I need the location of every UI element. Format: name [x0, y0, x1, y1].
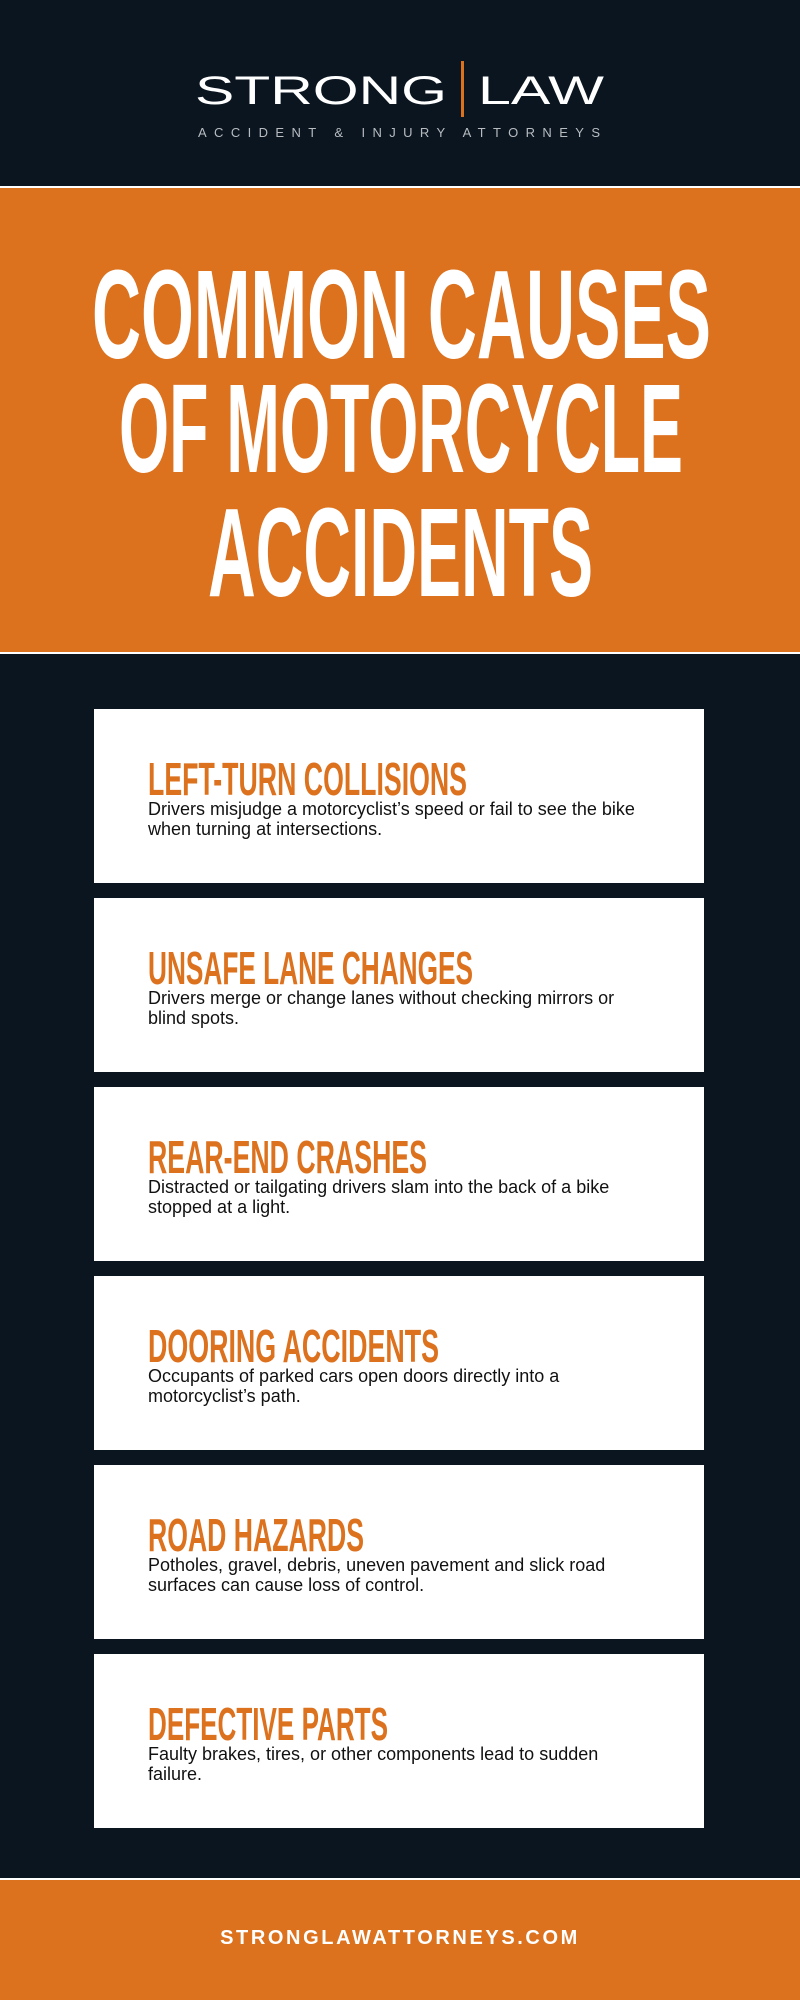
card: defective parts: Faulty brakes, tires, or other components lead to sudden failure. [148, 1744, 598, 1784]
title banner [0, 186, 800, 654]
card: road hazards [94, 1465, 704, 1639]
card: road hazards: Potholes, gravel, debris, uneven pavement and slick road surfaces can cause loss of control. [148, 1555, 605, 1595]
title [92, 244, 711, 623]
card: defective parts [94, 1654, 704, 1828]
card: unsafe lane changes: Drivers merge or change lanes without checking mirrors or blind spots. [148, 988, 614, 1028]
logo text: LAW [478, 69, 604, 113]
card: rear-end crashes [94, 1087, 704, 1261]
footer: website: STRONGLAWATTORNEYS.COM [220, 1927, 580, 1949]
card: rear-end crashes: Distracted or tailgating drivers slam into the back of a bike stopped at a light. [148, 1177, 609, 1217]
card: left-turn collisions [94, 709, 704, 883]
footer: website [0, 1878, 800, 2000]
card: dooring accidents [94, 1276, 704, 1450]
logo text [195, 61, 604, 140]
logo text: ACCIDENT & INJURY ATTORNEYS [198, 125, 600, 140]
card: left-turn collisions: Drivers misjudge a motorcyclist’s speed or fail to see the bike when turning at intersections. [148, 799, 635, 839]
card: dooring accidents: Occupants of parked cars open doors directly into a motorcyclist’s path. [148, 1366, 559, 1406]
logo text: STRONG [195, 69, 447, 113]
card: unsafe lane changes [94, 898, 704, 1072]
header: logo [0, 0, 800, 183]
